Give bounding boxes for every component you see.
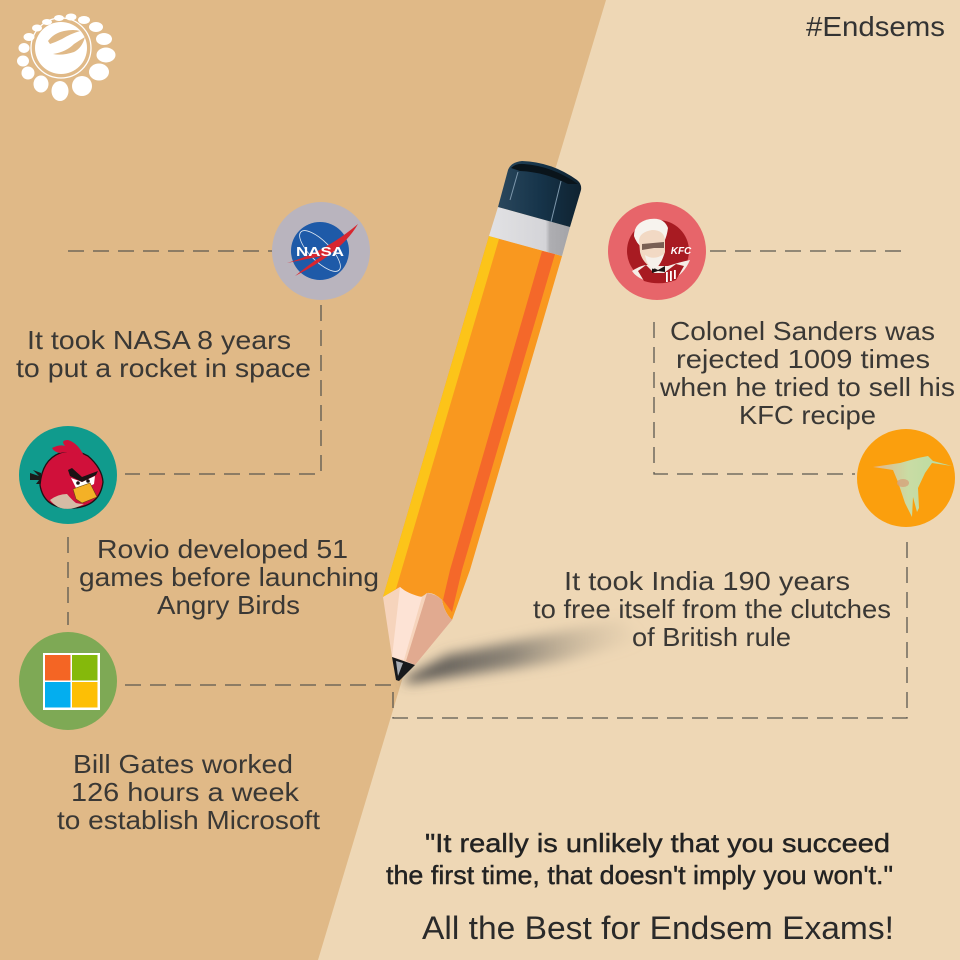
quote bbox=[386, 828, 893, 890]
quote: the first time, that doesn't imply you won't." bbox=[386, 860, 893, 890]
text: Bill Gates: 126 hours a week bbox=[71, 777, 300, 807]
text: Bill Gates: to establish Microsoft bbox=[57, 805, 321, 835]
text: KFC bbox=[659, 316, 955, 430]
text: Rovio: Angry Birds bbox=[157, 590, 300, 620]
text: KFC: rejected 1009 times bbox=[676, 344, 930, 374]
pencil yellow strip bbox=[383, 236, 499, 597]
pencil bbox=[383, 161, 581, 681]
text: KFC: Colonel Sanders was bbox=[670, 316, 935, 346]
text: India: of British rule bbox=[632, 622, 791, 652]
text: NASA: It took NASA 8 years bbox=[27, 325, 291, 355]
text: Rovio: Rovio developed 51 bbox=[97, 534, 348, 564]
pencil cap bbox=[498, 161, 581, 227]
icon: hummingbird bbox=[857, 429, 955, 527]
icon: Microsoft bbox=[19, 632, 117, 730]
text: India bbox=[533, 566, 891, 652]
hashtag: #Endsems bbox=[806, 11, 945, 42]
icon: KFC bbox=[608, 202, 706, 300]
pencil body bbox=[383, 236, 562, 620]
quote: "It really is unlikely that you succeed bbox=[425, 828, 890, 858]
pencil lead bbox=[392, 657, 415, 681]
pencil wood tip bbox=[383, 587, 452, 665]
text: Bill Gates: Bill Gates worked bbox=[73, 749, 293, 779]
text: Bill Gates bbox=[57, 749, 321, 835]
icon: Angry Bird bbox=[19, 426, 117, 524]
pencil dark strip bbox=[443, 251, 555, 612]
text: KFC: KFC recipe bbox=[739, 400, 876, 430]
icon: KFC: KFC bbox=[671, 246, 692, 257]
text: NASA bbox=[16, 325, 311, 383]
text: India: It took India 190 years bbox=[564, 566, 850, 596]
icon: NASA bbox=[272, 202, 370, 300]
logo bbox=[17, 14, 116, 101]
text: Rovio bbox=[79, 534, 379, 620]
background: left diagonal panel bbox=[0, 0, 606, 960]
pencil shadow bbox=[402, 620, 645, 683]
text: Rovio: games before launching bbox=[79, 562, 379, 592]
text: KFC: when he tried to sell his bbox=[659, 372, 955, 402]
text: India: to free itself from the clutches bbox=[533, 594, 891, 624]
text: NASA: to put a rocket in space bbox=[16, 353, 311, 383]
closing message: All the Best for Endsem Exams! bbox=[422, 910, 894, 946]
pencil ferrule bbox=[489, 207, 570, 256]
icon: NASA: NASA bbox=[296, 244, 345, 259]
dashed connectors bbox=[68, 251, 907, 718]
